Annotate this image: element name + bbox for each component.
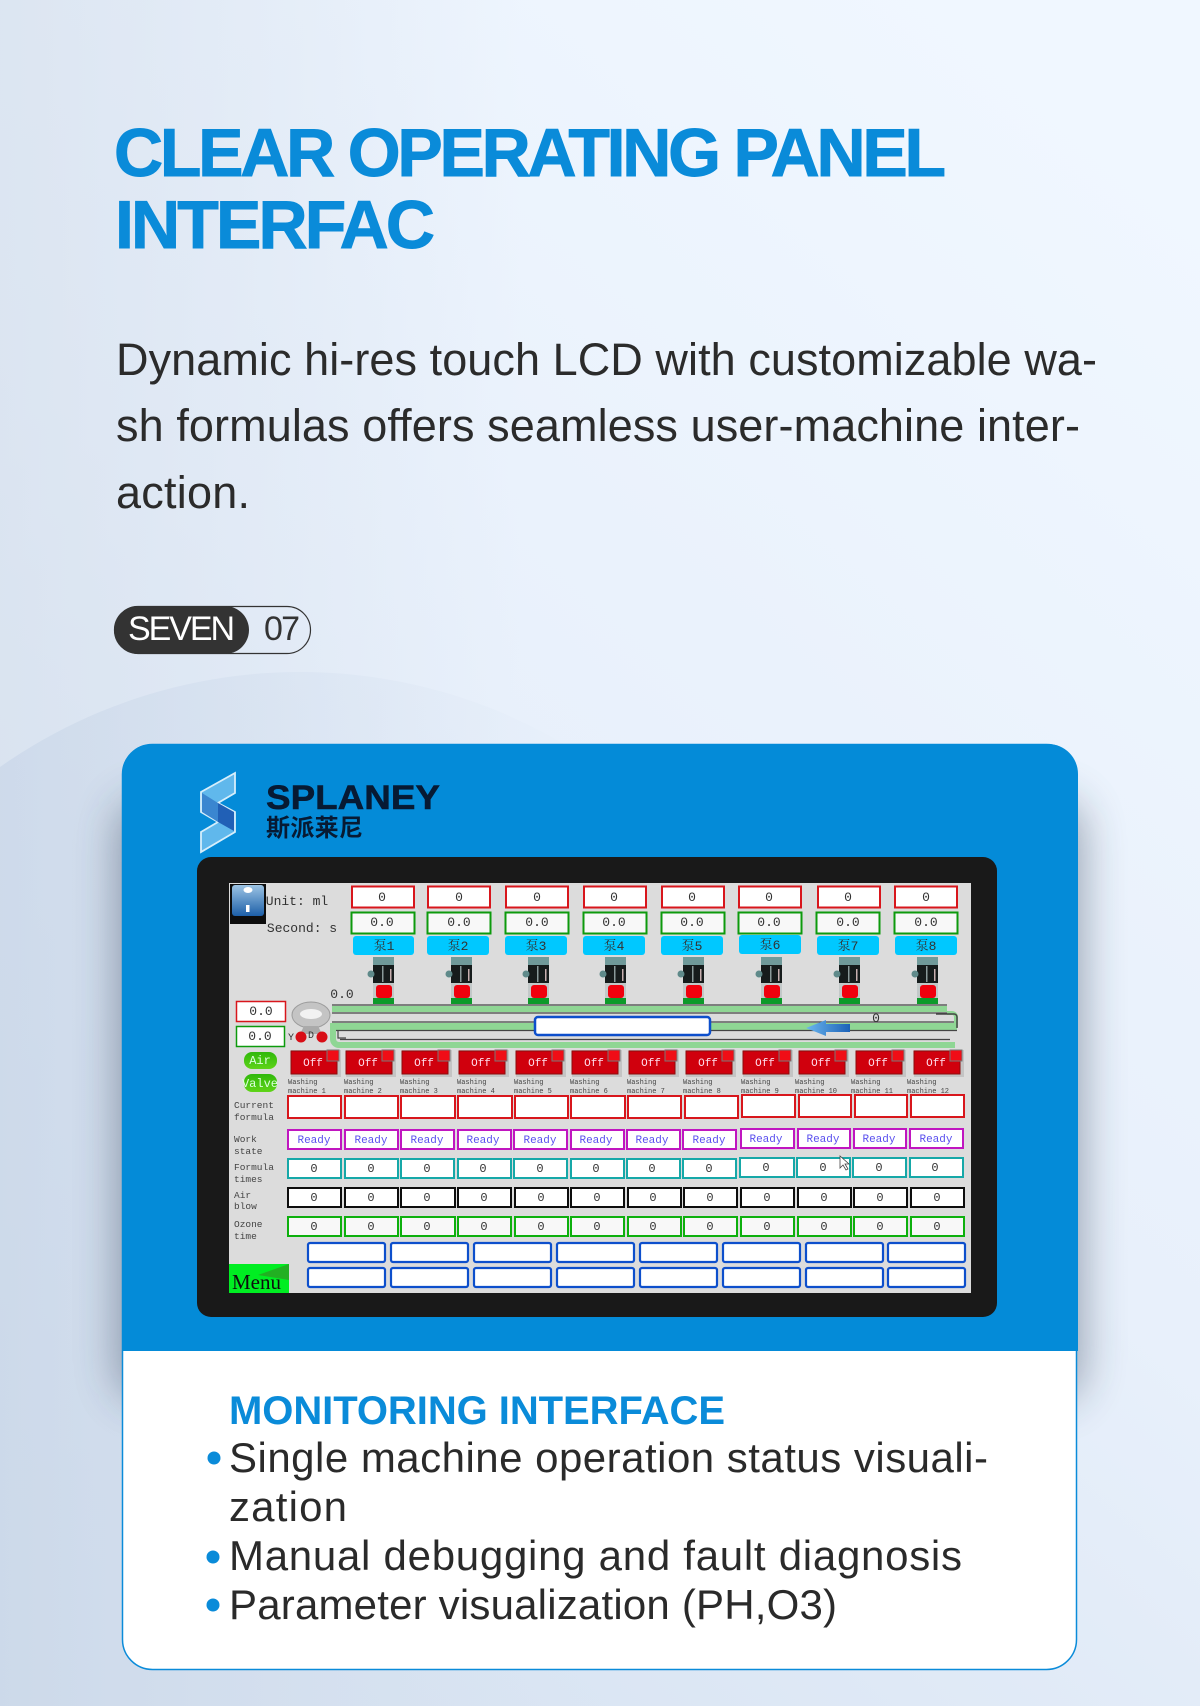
washing machine labels: machine 5	[514, 1088, 552, 1096]
row labels: Current	[234, 1100, 274, 1111]
row: pump volume: 0	[378, 890, 386, 905]
row: pump seconds: 0.0	[525, 915, 549, 930]
brand name: SPLANEY	[266, 779, 440, 817]
off buttons	[291, 1050, 964, 1077]
pump icons	[368, 957, 938, 1004]
row labels: Air	[234, 1190, 251, 1201]
washing machine labels: machine 6	[570, 1088, 608, 1096]
row: work state: Ready	[297, 1135, 331, 1147]
washing machine labels: machine 3	[400, 1088, 438, 1096]
row: ozone time: 0	[480, 1220, 488, 1234]
row: air blow: 0	[593, 1191, 601, 1205]
row: air blow: 0	[706, 1191, 714, 1205]
unit labels	[266, 894, 337, 936]
row: pump volume: 0	[765, 890, 773, 905]
monitoring interface text	[206, 1389, 988, 1628]
icon: S mark	[201, 773, 235, 852]
row: pump volume	[352, 886, 957, 908]
mixer readouts	[236, 1002, 286, 1046]
row: air blow: 0	[310, 1191, 318, 1205]
off buttons: Off	[471, 1058, 491, 1070]
bullet list: zation	[229, 1483, 347, 1530]
pipe system	[332, 1005, 957, 1045]
row: pump seconds: 0.0	[447, 915, 471, 930]
section badge	[114, 606, 310, 654]
row: pump name tabs: 泵2	[448, 939, 468, 954]
title: CLEAR OPERATING PANEL	[114, 115, 946, 191]
washing machine labels: Washing	[344, 1079, 373, 1087]
row: formula times: 0	[310, 1162, 318, 1176]
washing machine labels: machine 9	[741, 1088, 779, 1096]
row labels: formula	[234, 1112, 274, 1123]
row: pump name tabs: 泵6	[760, 938, 780, 953]
row: formula times: 0	[592, 1162, 600, 1176]
off buttons: Off	[584, 1058, 604, 1070]
bullet list: Manual debugging and fault diagnosis	[229, 1532, 962, 1579]
mixer readouts: 0.0	[249, 1004, 273, 1019]
bullet list	[206, 1434, 988, 1628]
off buttons: Off	[414, 1058, 434, 1070]
air and valve buttons: Air	[249, 1054, 271, 1068]
progress box	[535, 1017, 710, 1035]
row: pump name tabs: 泵4	[604, 939, 625, 954]
menu button	[229, 1264, 289, 1294]
row: work state: Ready	[523, 1135, 557, 1147]
off buttons: Off	[926, 1058, 946, 1070]
row: work state: Ready	[862, 1134, 896, 1146]
row: pump seconds: 0.0	[680, 915, 704, 930]
row: air blow: 0	[480, 1191, 488, 1205]
row: pump name tabs: 泵3	[526, 939, 546, 954]
washing machine labels: Washing	[400, 1079, 429, 1087]
washing machine labels: Washing	[741, 1079, 770, 1087]
row: ozone time: 0	[423, 1220, 431, 1234]
row: air blow: 0	[649, 1191, 657, 1205]
row: ozone time: 0	[649, 1220, 657, 1234]
washing machine labels: Washing	[288, 1079, 317, 1087]
card header: blue upper panel	[122, 744, 1078, 1351]
unit labels: Unit: ml	[266, 894, 328, 909]
title: INTERFAC	[115, 187, 435, 263]
washing machine labels: machine 8	[683, 1088, 721, 1096]
row: formula times: 0	[819, 1161, 827, 1175]
row: air blow: 0	[933, 1191, 941, 1205]
bullet list: Single machine operation status visuali-	[229, 1434, 988, 1481]
title	[114, 115, 946, 263]
row: air blow: 0	[367, 1191, 375, 1205]
row: work state: Ready	[354, 1135, 388, 1147]
off buttons: Off	[303, 1058, 323, 1070]
washing machine labels: machine 11	[851, 1088, 893, 1096]
row: current formula	[288, 1095, 964, 1118]
row: work state: Ready	[749, 1134, 783, 1146]
washing machine labels: Washing	[570, 1079, 599, 1087]
row: work state: Ready	[410, 1135, 444, 1147]
row: ozone time: 0	[820, 1220, 828, 1234]
row: air blow	[288, 1188, 964, 1207]
description text: action.	[116, 467, 250, 518]
washing machine labels: Washing	[683, 1079, 712, 1087]
washing machine labels: Washing	[907, 1079, 936, 1087]
description text: sh formulas offers seamless user-machine inter-	[116, 400, 1080, 451]
panel heading: MONITORING INTERFACE	[229, 1389, 725, 1433]
row: pump seconds	[352, 912, 958, 934]
row: ozone time: 0	[876, 1220, 884, 1234]
row: air blow: 0	[423, 1191, 431, 1205]
row: pump seconds: 0.0	[757, 915, 781, 930]
row: pump volume: 0	[610, 890, 618, 905]
row labels: time	[234, 1231, 257, 1242]
row: pump volume: 0	[455, 890, 463, 905]
row: formula times: 0	[423, 1162, 431, 1176]
mixer valve: D	[308, 1031, 314, 1042]
row labels: Ozone	[234, 1219, 263, 1230]
row: pump name tabs: 泵7	[838, 939, 858, 954]
mixer valve: Y	[288, 1033, 294, 1044]
row: work state	[288, 1129, 963, 1149]
row: ozone time: 0	[933, 1220, 941, 1234]
row: ozone time	[288, 1217, 964, 1236]
row: pump name tabs: 泵1	[374, 939, 395, 954]
row: pump volume: 0	[688, 890, 696, 905]
mixer readouts: 0.0	[248, 1029, 272, 1044]
brand logo	[201, 773, 440, 852]
description text	[116, 334, 1097, 518]
washing machine labels	[288, 1079, 949, 1096]
row labels: times	[234, 1174, 263, 1185]
off buttons: Off	[528, 1058, 548, 1070]
row: formula times: 0	[705, 1162, 713, 1176]
pipe system: 0	[872, 1011, 880, 1026]
washing machine labels: machine 2	[344, 1088, 382, 1096]
row: work state: Ready	[692, 1135, 726, 1147]
row: ozone time: 0	[763, 1220, 771, 1234]
washing machine labels: Washing	[795, 1079, 824, 1087]
row: formula times: 0	[648, 1162, 656, 1176]
row: air blow: 0	[820, 1191, 828, 1205]
row: pump name tabs: 泵8	[916, 939, 936, 954]
row: work state: Ready	[806, 1134, 840, 1146]
row: formula times: 0	[479, 1162, 487, 1176]
section badge: SEVEN	[128, 610, 235, 648]
washing machine labels: machine 10	[795, 1088, 837, 1096]
row: work state: Ready	[466, 1135, 500, 1147]
section badge: 07	[264, 610, 300, 648]
mouse cursor	[840, 1156, 849, 1170]
row: ozone time: 0	[367, 1220, 375, 1234]
row: work state: Ready	[579, 1135, 613, 1147]
description text: Dynamic hi-res touch LCD with customizable wa-	[116, 334, 1097, 385]
washing machine labels: Washing	[851, 1079, 880, 1087]
off buttons: Off	[698, 1058, 718, 1070]
brand name: 斯派莱尼	[266, 808, 363, 843]
row: pump volume: 0	[533, 890, 541, 905]
row: ozone time: 0	[310, 1220, 318, 1234]
air and valve buttons: Valve	[242, 1077, 278, 1091]
row: work state: Ready	[919, 1134, 953, 1146]
row: pump name tabs: 泵5	[682, 939, 702, 954]
washing machine labels: machine 1	[288, 1088, 326, 1096]
monitor bezel	[197, 857, 997, 1317]
row: formula times	[288, 1158, 963, 1178]
icon: info button	[230, 884, 266, 924]
row: pump seconds: 0.0	[370, 915, 394, 930]
mixer valve	[288, 987, 354, 1044]
row: air blow: 0	[763, 1191, 771, 1205]
off buttons: Off	[358, 1058, 378, 1070]
row: air blow: 0	[537, 1191, 545, 1205]
row: work state: Ready	[635, 1135, 669, 1147]
washing machine labels: machine 7	[627, 1088, 665, 1096]
blue status boxes	[308, 1243, 965, 1287]
row: ozone time: 0	[537, 1220, 545, 1234]
row labels	[234, 1100, 274, 1242]
washing machine labels: Washing	[627, 1079, 656, 1087]
row: pump name tabs	[353, 935, 957, 955]
row: ozone time: 0	[593, 1220, 601, 1234]
off buttons: Off	[755, 1058, 775, 1070]
row labels: blow	[234, 1201, 257, 1212]
row: pump volume: 0	[844, 890, 852, 905]
row: formula times: 0	[931, 1161, 939, 1175]
air and valve buttons	[242, 1052, 278, 1092]
card shadow	[118, 800, 1082, 1400]
row labels: Formula	[234, 1162, 274, 1173]
bullet list: Parameter visualization (PH,O3)	[229, 1581, 837, 1628]
flow arrow	[806, 1020, 850, 1036]
row: pump seconds: 0.0	[602, 915, 626, 930]
washing machine labels: machine 12	[907, 1088, 949, 1096]
washing machine labels: Washing	[514, 1079, 543, 1087]
menu button: Menu	[232, 1270, 281, 1294]
row: air blow: 0	[876, 1191, 884, 1205]
row: formula times: 0	[762, 1161, 770, 1175]
washing machine labels: Washing	[457, 1079, 486, 1087]
card body: white lower panel	[122, 744, 1076, 1670]
off buttons: Off	[811, 1058, 831, 1070]
row labels: state	[234, 1146, 263, 1157]
row: formula times: 0	[875, 1161, 883, 1175]
brand name	[266, 779, 440, 843]
touch screen	[229, 883, 971, 1294]
off buttons: Off	[868, 1058, 888, 1070]
mixer valve: 0.0	[330, 987, 354, 1002]
unit labels: Second: s	[267, 921, 337, 936]
off buttons: Off	[641, 1058, 661, 1070]
row: pump volume: 0	[922, 890, 930, 905]
row: formula times: 0	[536, 1162, 544, 1176]
row labels: Work	[234, 1134, 257, 1145]
row: pump seconds: 0.0	[836, 915, 860, 930]
row: ozone time: 0	[706, 1220, 714, 1234]
row: formula times: 0	[367, 1162, 375, 1176]
washing machine labels: machine 4	[457, 1088, 495, 1096]
card	[122, 744, 1078, 1670]
row: pump seconds: 0.0	[914, 915, 938, 930]
